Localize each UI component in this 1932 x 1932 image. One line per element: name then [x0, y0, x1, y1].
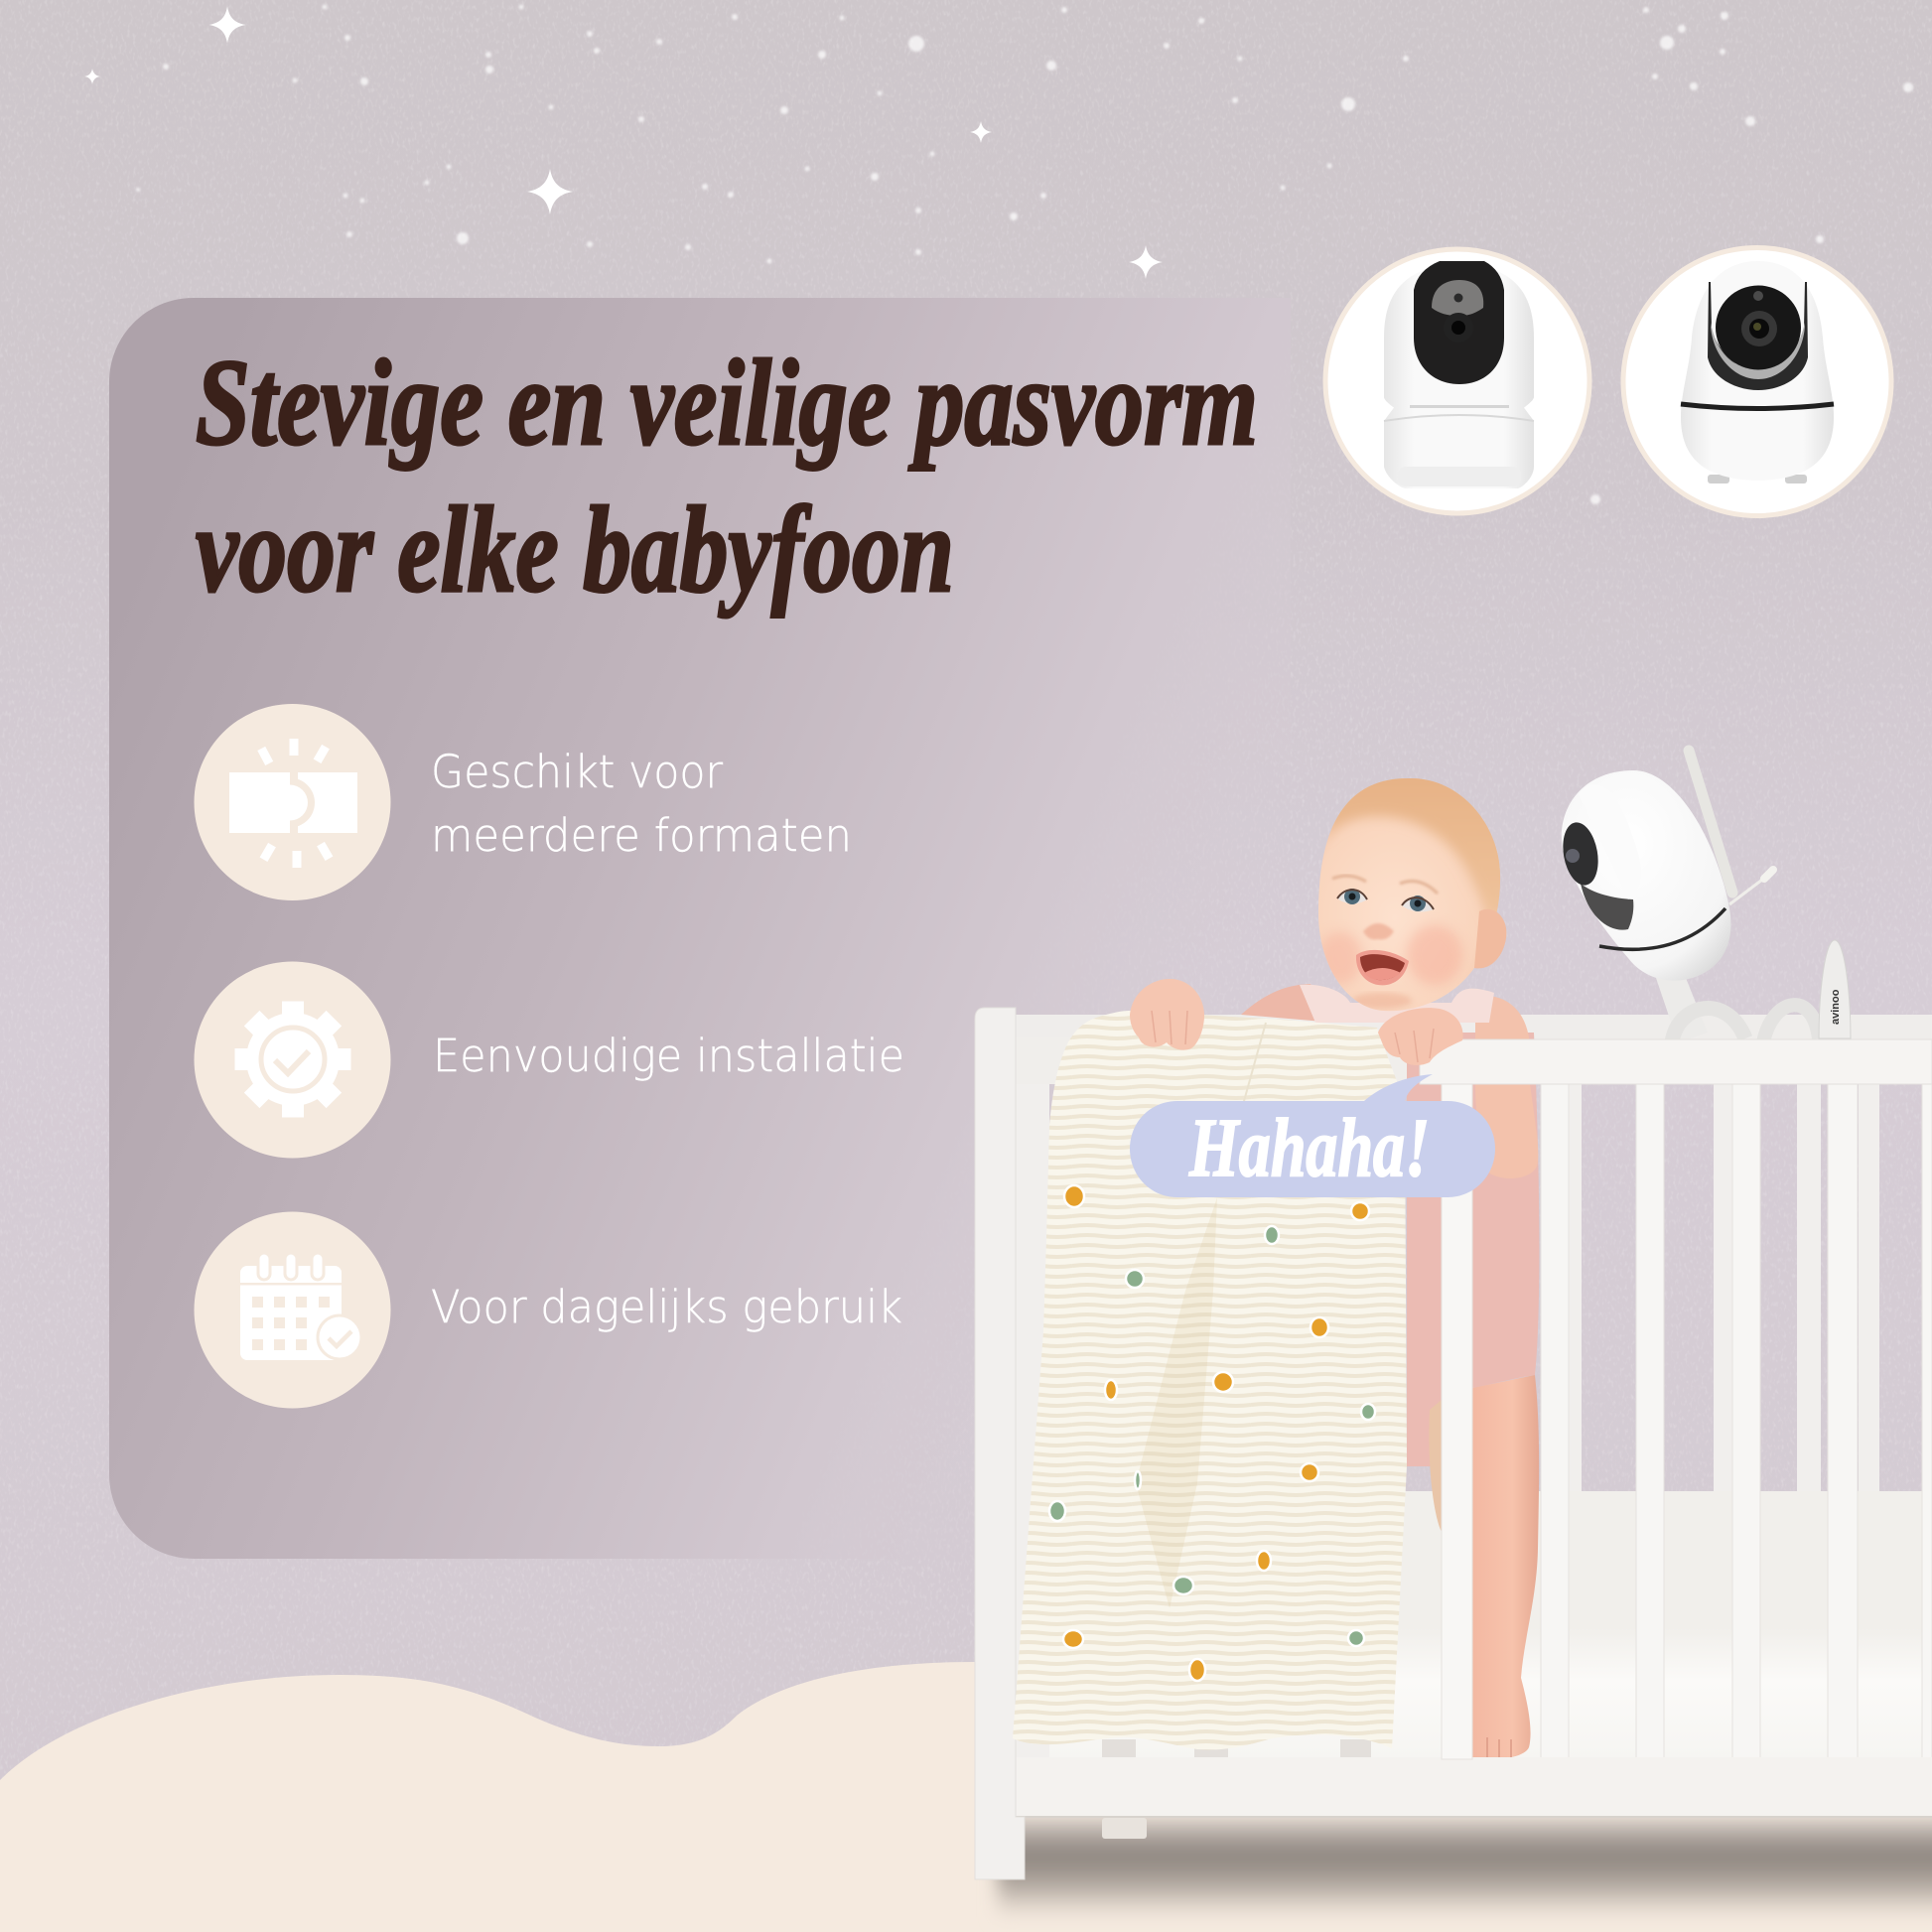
feature 1: puzzle icon — [195, 704, 391, 900]
speech bubble — [1130, 1074, 1495, 1197]
panel: text card with fading gradient — [109, 298, 1291, 1559]
crib: front slat over the baby — [1442, 1084, 1472, 1759]
baby monitor camera on the rail — [1559, 751, 1851, 1042]
feature 1 label — [431, 746, 852, 862]
crib: front slats and bottom rail — [1016, 1084, 1932, 1839]
feature 2 label: Eenvoudige installatie — [433, 1030, 904, 1082]
title: Stevige en veilige pasvorm — [196, 335, 1258, 471]
feature 3 label: Voor dagelijks gebruik — [431, 1281, 902, 1333]
product circle 2: rounded egg camera — [1623, 248, 1891, 516]
baby hand: left — [1130, 979, 1204, 1050]
baby: head — [1318, 778, 1507, 1011]
feature 3: calendar icon — [195, 1211, 391, 1408]
baby: leg and foot — [1429, 1375, 1539, 1760]
blanket orange dots — [1063, 1185, 1369, 1681]
feature 2: gear check icon — [195, 961, 391, 1158]
blanket green dots — [1049, 1226, 1375, 1646]
decorative stars — [84, 6, 1163, 279]
baby: right arm — [1475, 996, 1538, 1178]
crib: left post — [975, 1008, 1025, 1879]
feature 1 label: Geschikt voor — [431, 746, 723, 798]
baby: eyes — [1332, 876, 1438, 911]
baby — [1241, 764, 1539, 1760]
speech bubble text: Hahaha! — [1188, 1102, 1430, 1194]
title — [196, 335, 1258, 618]
crib: mattress and back rails — [1016, 1015, 1932, 1759]
crib shadow on floor — [998, 1818, 1932, 1917]
feature 1 label: meerdere formaten — [431, 809, 852, 862]
baby: sheer top — [1300, 985, 1494, 1023]
baby hand: right — [1378, 1008, 1463, 1065]
baby: onesie body — [1407, 1033, 1539, 1466]
title: voor elke babyfoon — [196, 482, 954, 618]
baby: nose — [1363, 923, 1394, 939]
baby monitor camera on the rail: avinoo — [1830, 989, 1842, 1025]
blanket fold — [1136, 1197, 1217, 1608]
baby: left shoulder — [1241, 984, 1335, 1023]
crib: top front rail — [1420, 1039, 1932, 1084]
product circle 1: camera with square base — [1325, 249, 1589, 513]
cream hill at the bottom — [0, 1662, 1932, 1932]
blanket with dots — [1013, 1011, 1407, 1750]
baby: ear — [1474, 909, 1506, 968]
baby: mouth — [1356, 950, 1409, 985]
